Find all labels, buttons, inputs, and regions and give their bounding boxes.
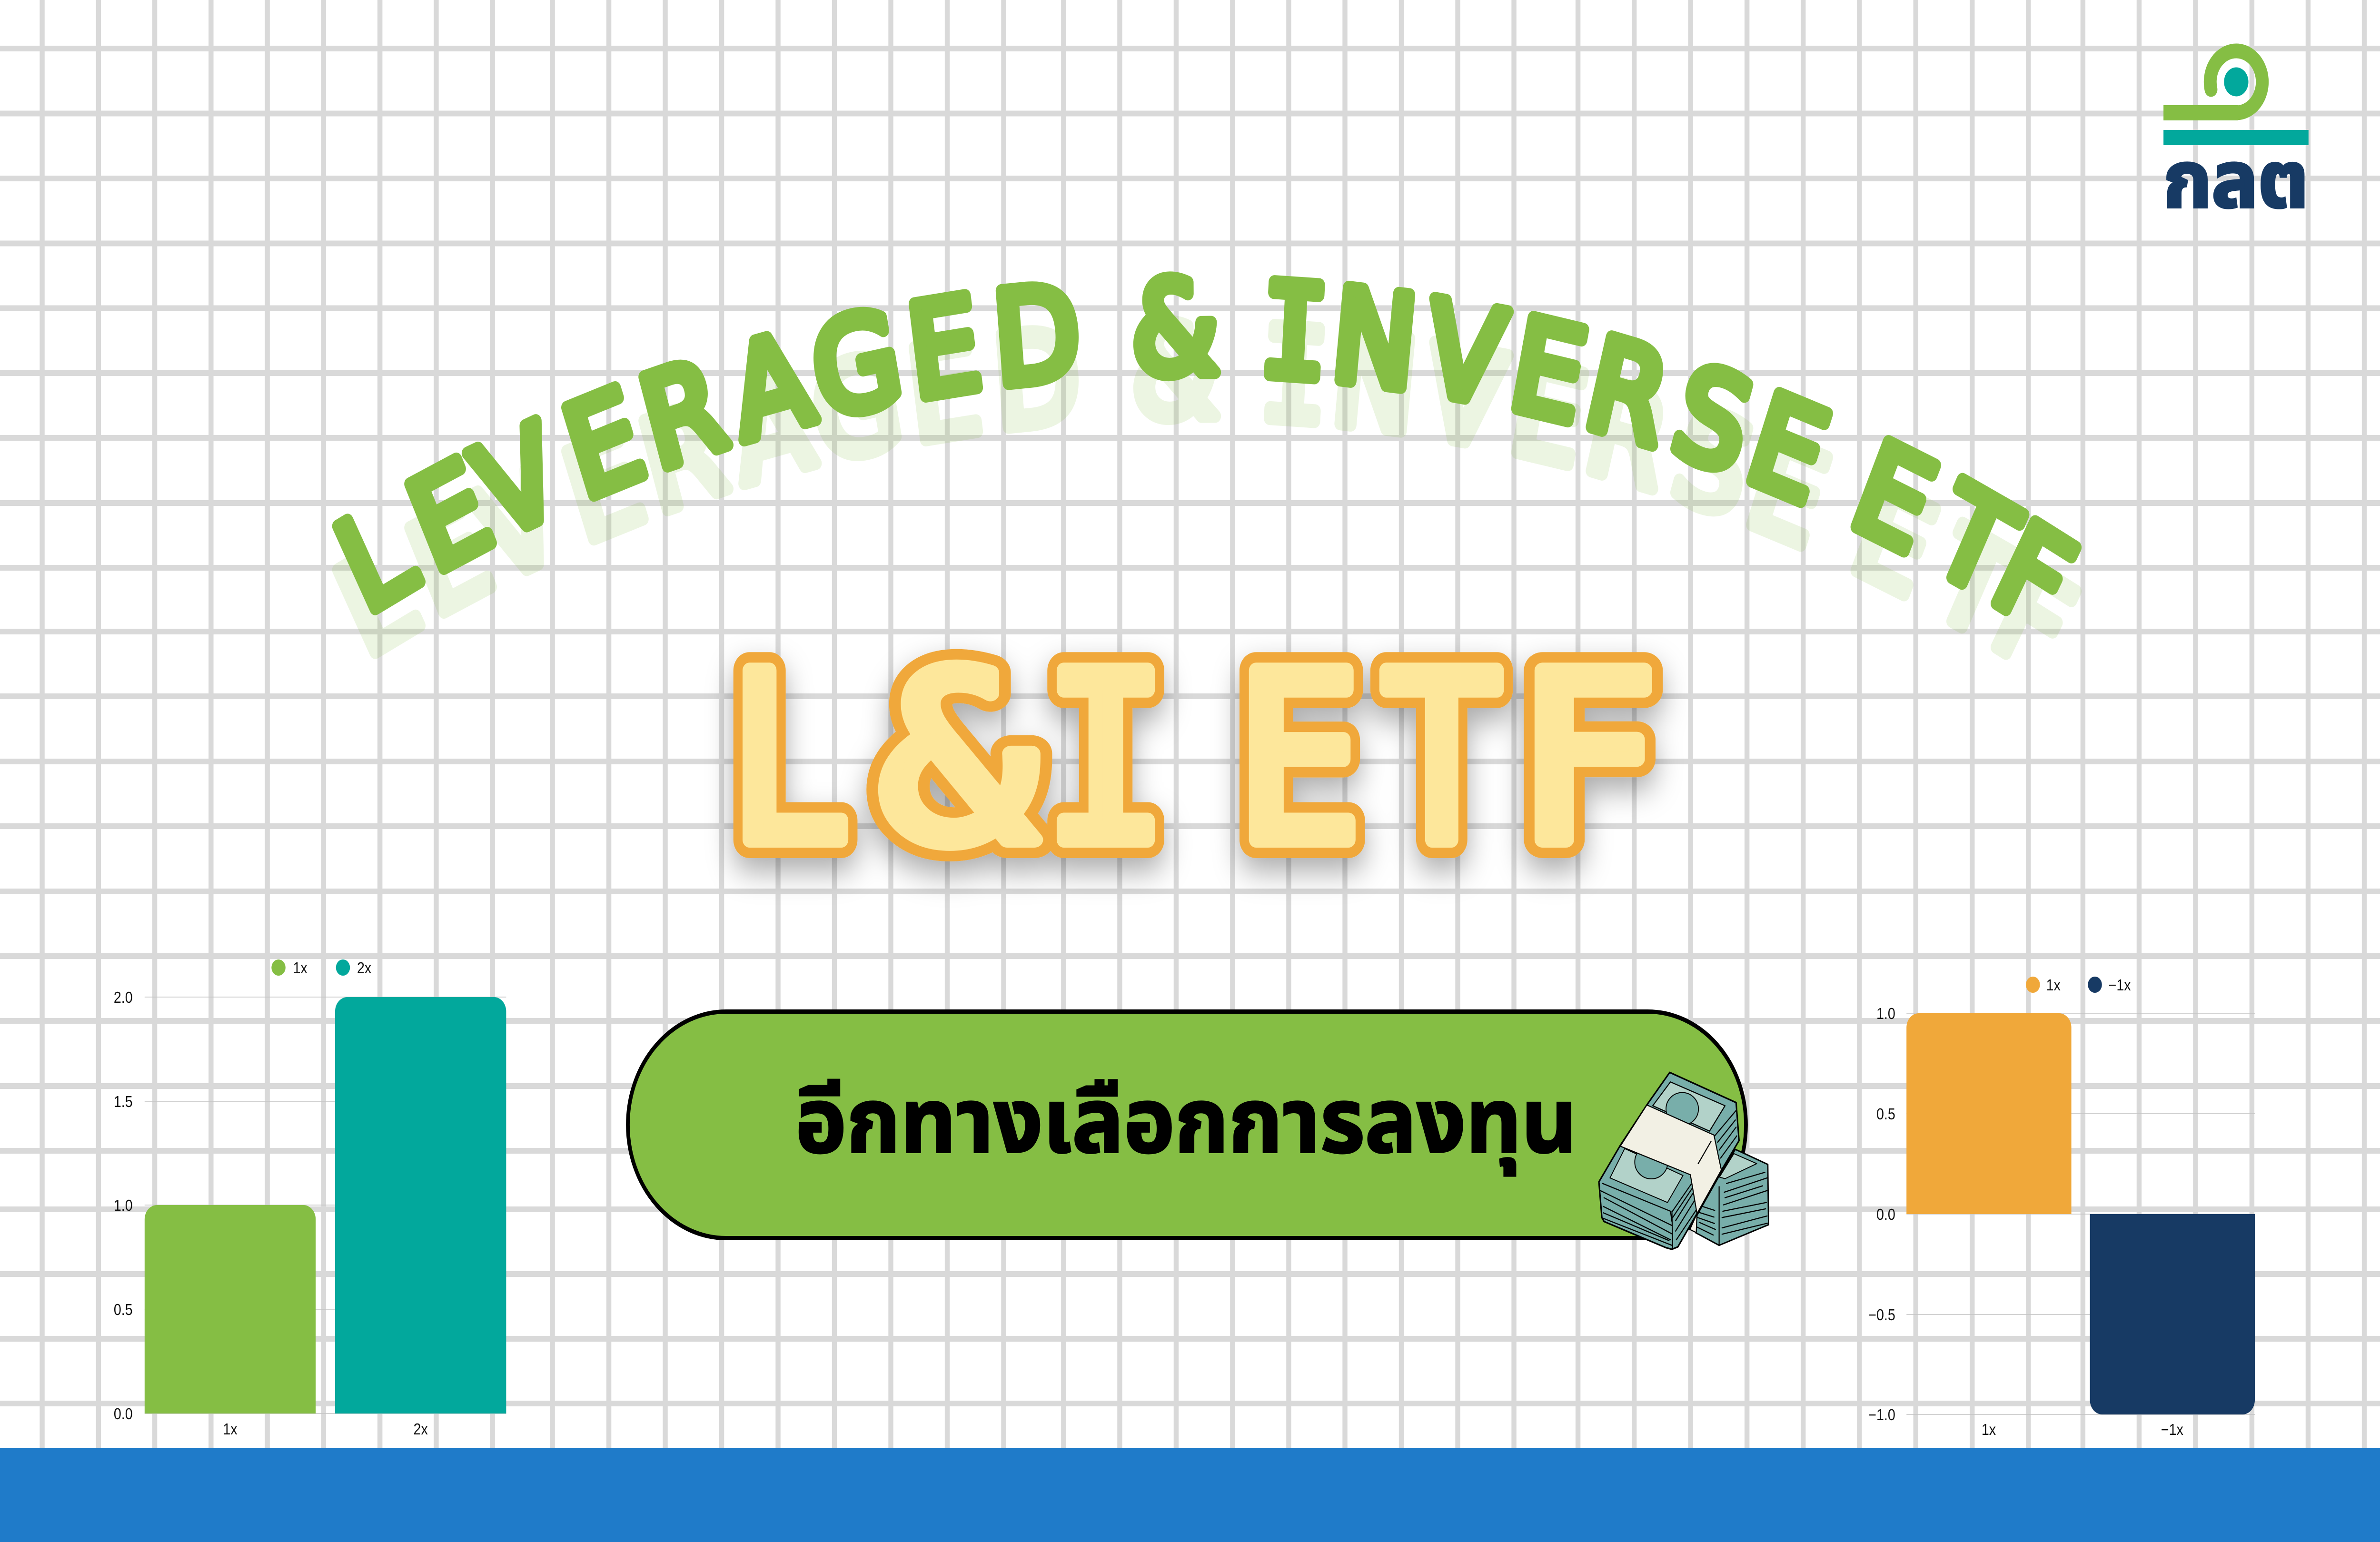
legend: 1x [2046,976,2061,994]
main heading: L [728,624,851,895]
logo: SEC Thailand [2163,51,2309,224]
main heading: F [1516,624,1658,895]
y axis labels: 2.0 [114,988,133,1006]
curved title: LEVERAGED & INVERSE ETF [318,255,2093,660]
y axis labels: 0.5 [1876,1105,1895,1123]
subtitle pill [628,1012,1746,1238]
y axis labels [1868,1005,1895,1423]
curved title shadow: LEVERAGED & INVERSE ETF [318,298,2093,704]
bottom blue band [0,1448,2380,1542]
y axis labels: 0.5 [114,1301,133,1318]
bar: -1x [2090,1214,2255,1414]
pill background [628,1012,1746,1238]
x axis labels [223,1420,428,1438]
icon: stack of money [1599,1072,1768,1249]
pill text: อีกทางเลือกการลงทุน [795,1070,1577,1176]
y axis labels: 1.0 [1876,1005,1895,1022]
bar: 1x [1906,1013,2072,1214]
main heading [728,624,1658,895]
main heading: E [1236,624,1362,895]
y axis labels [114,988,133,1423]
x axis labels: 1x [1982,1421,1996,1438]
legend [2026,976,2131,994]
main heading: L [728,624,851,895]
bar: 1x [145,1205,316,1414]
right bar chart [1868,976,2255,1438]
bar: 2x [335,997,506,1414]
logo mark: green swirl [2163,51,2262,120]
main heading: T [1381,624,1502,895]
y axis labels: 0.0 [114,1405,133,1423]
main heading: E [1236,624,1362,895]
legend: −1x [2109,976,2131,994]
y axis labels: −1.0 [1868,1406,1895,1423]
legend: 1x [293,959,307,977]
logo mark: teal bar [2163,130,2309,145]
legend: 2x [357,959,372,977]
logo wordmark: กลต [2163,136,2309,224]
main heading: F [1516,624,1658,895]
left bar chart [114,959,506,1438]
y axis labels: −0.5 [1868,1306,1895,1324]
main heading: I [1043,624,1169,895]
chart gridlines [1906,1013,2255,1414]
logo mark: teal dot [2224,68,2249,96]
legend [271,959,372,977]
x axis labels: −1x [2161,1421,2183,1438]
main heading: & [880,624,1038,895]
main heading: T [1381,624,1502,895]
main heading: I [1043,624,1169,895]
y axis labels: 0.0 [1876,1206,1895,1223]
x axis labels [1982,1421,2183,1438]
main heading: & [880,624,1038,895]
chart gridlines [145,997,506,1414]
y axis labels: 1.5 [114,1093,133,1110]
x axis labels: 2x [414,1420,428,1438]
y axis labels: 1.0 [114,1196,133,1214]
x axis labels: 1x [223,1420,238,1438]
